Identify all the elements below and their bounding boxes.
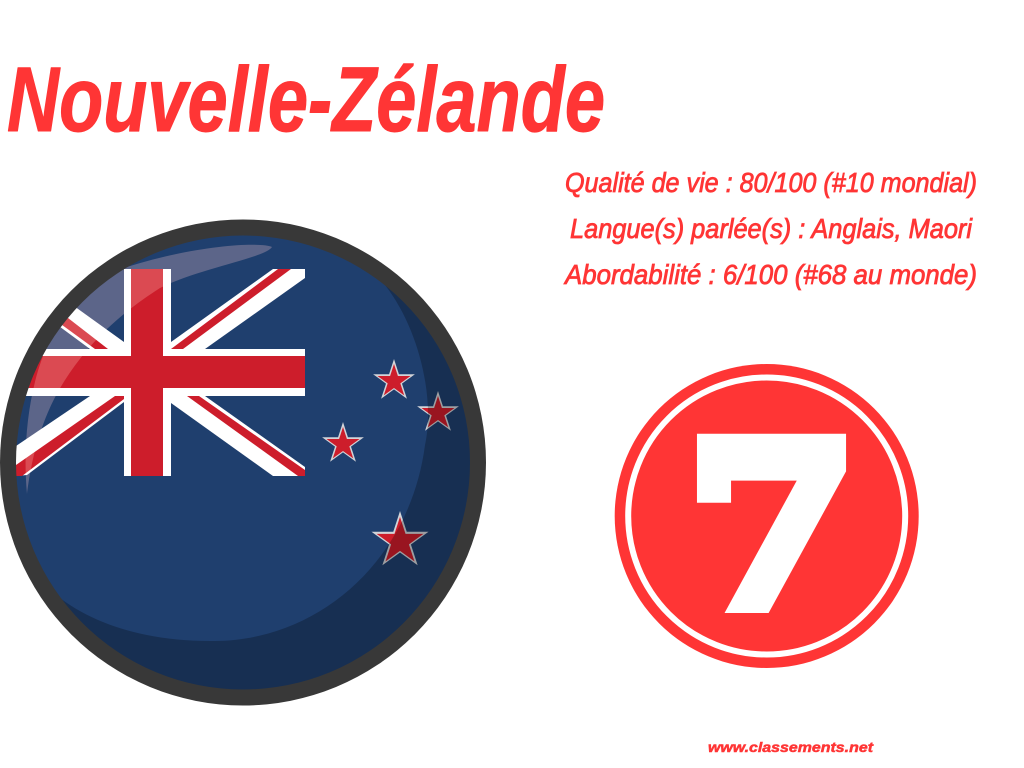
badge disc	[615, 364, 919, 668]
star 3	[322, 422, 364, 462]
rank number: 7	[686, 395, 858, 658]
badge ring	[628, 378, 905, 654]
title: Nouvelle-Zélande	[7, 49, 605, 151]
footer website: www.classements.net	[708, 739, 875, 755]
union jack	[10, 260, 305, 476]
button ring	[0, 220, 486, 706]
star 4	[371, 511, 429, 565]
flag surface	[16, 236, 470, 690]
gloss highlight	[26, 245, 272, 494]
fact: affordability: Abordabilité : 6/100 (#68 au monde)	[563, 259, 977, 290]
star 1	[373, 359, 415, 399]
fact: quality of life: Qualité de vie : 80/100 (#10 mondial)	[565, 167, 977, 198]
text block: country facts	[563, 167, 977, 290]
icon: New Zealand flag button	[0, 220, 490, 720]
fact: languages: Langue(s) parlée(s) : Anglais, Maori	[570, 213, 973, 244]
shadow crescent	[62, 286, 470, 690]
badge: rank 7	[615, 364, 919, 668]
star 2	[417, 391, 459, 431]
